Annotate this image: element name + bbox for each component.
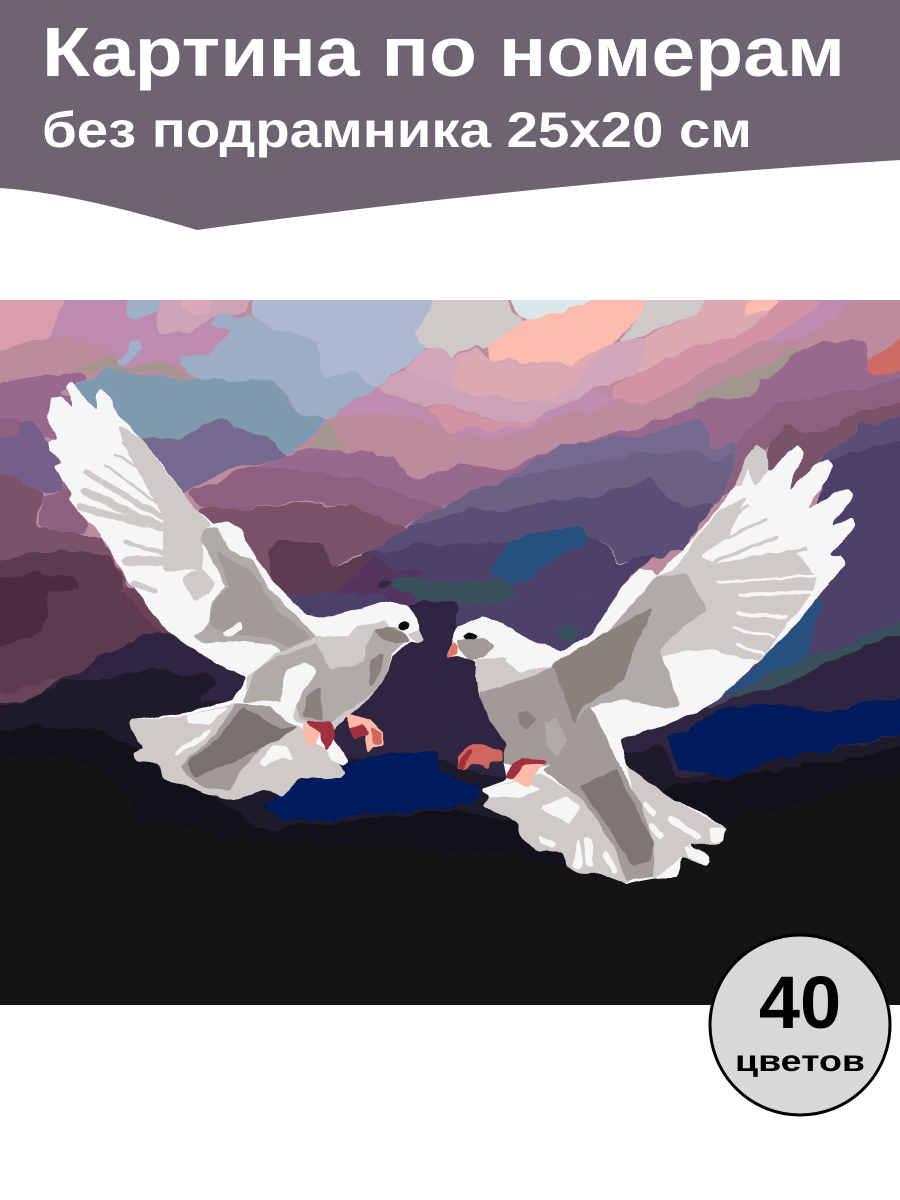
head and eye: [445, 617, 560, 672]
upper sky and mountain layers: [0, 285, 900, 615]
right dove: [445, 445, 855, 883]
head and eye: [323, 602, 423, 643]
subtitle: без подрамника 25x20 см: [42, 102, 752, 158]
feet: [458, 745, 545, 788]
lower mountains and dark foreground: [0, 590, 900, 1040]
badge label: цветов: [735, 1045, 865, 1078]
mountain and sky background: [0, 300, 900, 1005]
header banner: [0, 0, 900, 230]
title: Картина по номерам: [42, 13, 845, 91]
badge: 40 colours: [710, 935, 890, 1115]
painting: doves over mountains at dusk: [0, 300, 900, 1005]
badge number: 40: [759, 961, 841, 1044]
left dove: [47, 383, 423, 800]
feet: [302, 713, 383, 753]
